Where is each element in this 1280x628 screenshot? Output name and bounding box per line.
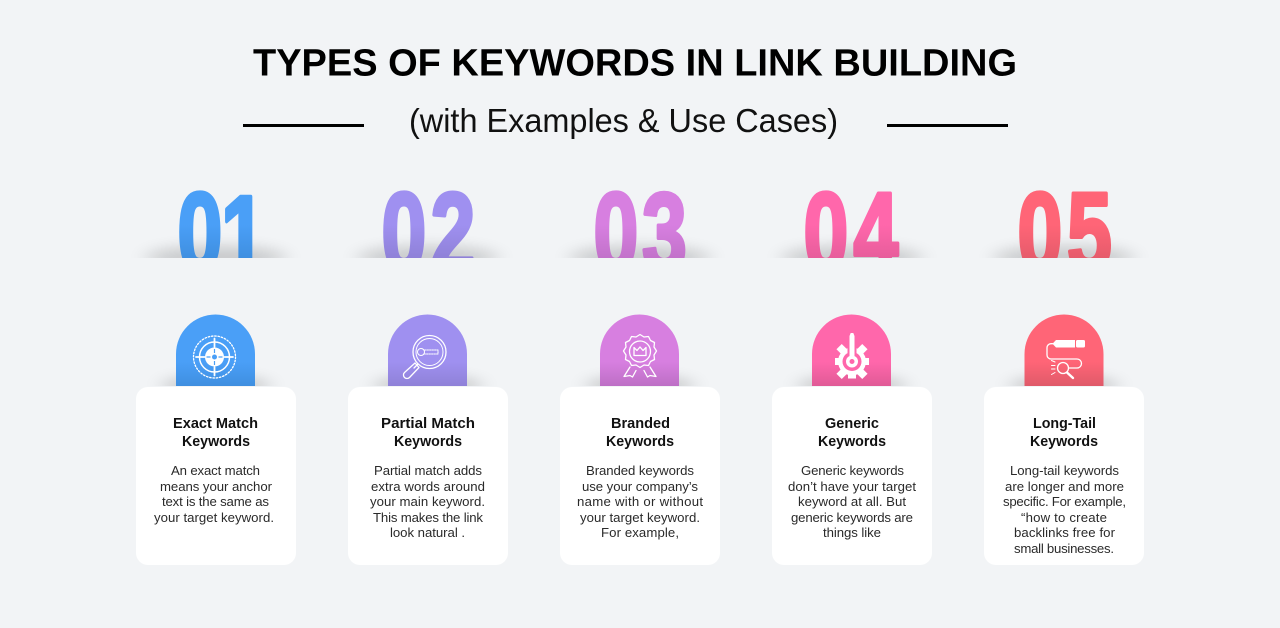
card heading: Keywords bbox=[394, 434, 462, 450]
panel: partial match bbox=[348, 314, 508, 565]
card body: your main keyword. bbox=[370, 494, 485, 509]
card body: extra words around bbox=[371, 479, 485, 494]
number 04: 04 bbox=[804, 170, 898, 295]
number 01 bbox=[144, 190, 288, 258]
card heading: Keywords bbox=[182, 434, 250, 450]
subtitle: (with Examples & Use Cases) bbox=[409, 102, 838, 139]
card body: small businesses. bbox=[1014, 541, 1114, 556]
card body bbox=[1003, 463, 1126, 556]
card heading bbox=[1030, 416, 1098, 450]
card heading: Keywords bbox=[1030, 434, 1098, 450]
number 05 bbox=[992, 190, 1136, 258]
number 04 bbox=[780, 190, 924, 258]
card body: Branded keywords bbox=[586, 463, 694, 478]
card heading bbox=[173, 416, 258, 450]
card heading: Generic bbox=[825, 416, 879, 432]
card heading: Keywords bbox=[818, 434, 886, 450]
number 02: 02 bbox=[382, 170, 475, 295]
subtitle rule right bbox=[887, 124, 1008, 127]
card body: don’t have your target bbox=[788, 479, 916, 494]
icon tab: blue arch with target bbox=[162, 314, 270, 395]
card heading bbox=[381, 416, 475, 450]
card bbox=[348, 387, 508, 565]
card body bbox=[370, 463, 485, 540]
card heading bbox=[818, 416, 886, 450]
card bbox=[772, 387, 932, 565]
card body: text is the same as bbox=[162, 494, 269, 509]
number 03 bbox=[568, 190, 712, 258]
number 02 bbox=[356, 190, 500, 258]
card body: use your company’s bbox=[582, 479, 698, 494]
card body: name with or without bbox=[577, 494, 703, 509]
number 01: 01 bbox=[177, 170, 266, 298]
card body: For example, bbox=[601, 525, 679, 540]
subtitle rule left bbox=[243, 124, 364, 127]
panel: exact match bbox=[136, 314, 296, 565]
number 05: 05 bbox=[1018, 170, 1112, 295]
number 03: 03 bbox=[593, 170, 687, 295]
card body bbox=[154, 463, 274, 525]
icon tab: pink arch with key and gear bbox=[798, 314, 906, 395]
card body: Partial match adds bbox=[374, 463, 482, 478]
card bbox=[984, 387, 1144, 565]
card body: Long-tail keywords bbox=[1010, 463, 1119, 478]
card heading: Exact Match bbox=[173, 416, 258, 432]
title: TYPES OF KEYWORDS IN LINK BUILDING bbox=[253, 42, 1017, 84]
card body: are longer and more bbox=[1005, 479, 1124, 494]
panel: generic bbox=[772, 314, 932, 565]
card body: specific. For example, bbox=[1003, 494, 1126, 509]
card body: keyword at all. But bbox=[798, 494, 906, 509]
card body: Generic keywords bbox=[801, 463, 904, 478]
card body: your target keyword. bbox=[580, 510, 700, 525]
card body: generic keywords are bbox=[791, 510, 913, 525]
icon tab: orchid arch with award badge bbox=[586, 314, 694, 395]
card body: your target keyword. bbox=[154, 510, 274, 525]
card body: This makes the link bbox=[373, 510, 483, 525]
card heading: Partial Match bbox=[381, 416, 475, 432]
icon tab: coral arch with search bar and cable bbox=[1010, 314, 1118, 395]
card body: things like bbox=[823, 525, 881, 540]
card body: means your anchor bbox=[160, 479, 273, 494]
card body: An exact match bbox=[171, 463, 260, 478]
panel: long-tail bbox=[984, 314, 1144, 565]
icon tab: purple arch with magnifier and key bbox=[374, 314, 482, 395]
card bbox=[560, 387, 720, 565]
card heading: Branded bbox=[611, 416, 670, 432]
card body: “how to create bbox=[1021, 510, 1107, 525]
card heading bbox=[606, 416, 674, 450]
card heading: Keywords bbox=[606, 434, 674, 450]
card body bbox=[788, 463, 916, 540]
card body: look natural . bbox=[390, 525, 465, 540]
card body: backlinks free for bbox=[1014, 525, 1116, 540]
panel: branded bbox=[560, 314, 720, 565]
card heading: Long-Tail bbox=[1033, 416, 1096, 432]
card bbox=[136, 387, 296, 565]
card body bbox=[577, 463, 703, 540]
